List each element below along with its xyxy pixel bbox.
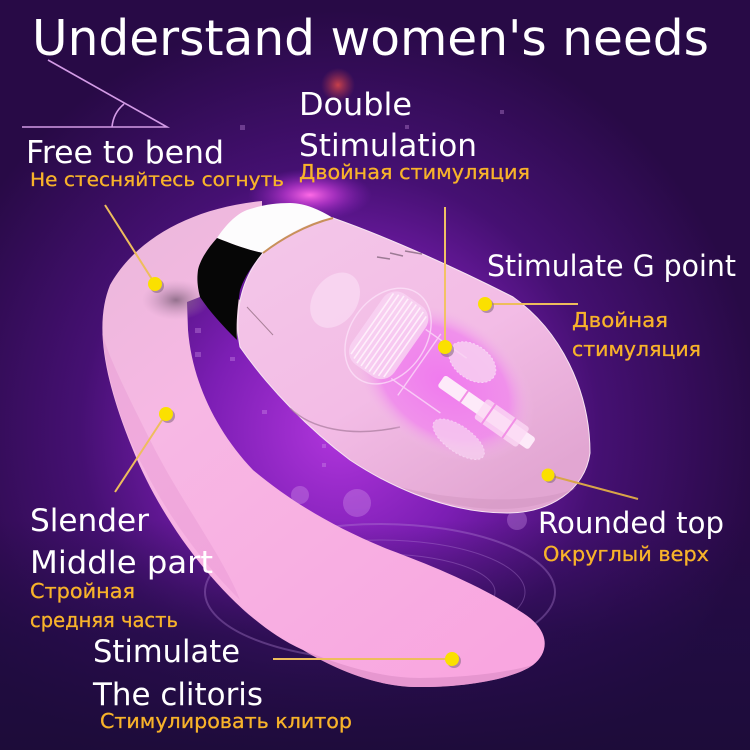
label: stimulate G point: Двойная [572,308,668,332]
callout: double stimulation pointer [438,207,454,357]
label: free to bend: Не стесняйтесь согнуть [30,169,284,191]
title: Understand women's needs [32,10,709,67]
heading: double stimulation: Двойная стимуляция [299,160,530,184]
callout: free to bend pointer [105,205,164,293]
motor illustration [275,236,571,500]
heading: double stimulation: Double [299,87,412,123]
callout: G point pointer [478,297,578,313]
device: pink collar strip [198,280,240,340]
device: curved pink band [102,201,545,687]
heading: double stimulation: Stimulation [299,128,477,164]
label: rounded top: Rounded top [538,506,724,540]
label: stimulate the clitoris: Стимулировать клитор [100,709,352,733]
label: slender middle part [30,503,213,632]
label: rounded top: Округлый верх [543,542,709,566]
label: rounded top [538,506,724,566]
label: stimulate G point: стимуляция [572,337,701,361]
label: free to bend: Free to bend [26,135,224,171]
label: stimulate G point: Stimulate G point [487,249,736,283]
label: stimulate G point [487,249,736,361]
label: slender middle part: Middle part [30,545,213,581]
device: egg-shaped body [238,218,590,513]
label: slender middle part: Стройная [30,579,135,603]
label: stimulate the clitoris: The clitoris [92,677,263,713]
angle diagram icon [22,60,167,127]
label: stimulate the clitoris: Stimulate [93,634,240,670]
callout: slender middle pointer [115,407,175,492]
callout: stimulate clitoris pointer [273,652,461,668]
callout: rounded top pointer [542,468,638,499]
device: chrome band [197,203,333,340]
label: free to bend [26,135,284,191]
label: stimulate the clitoris [92,634,352,733]
label: slender middle part: средняя часть [30,608,178,632]
label: slender middle part: Slender [30,503,149,539]
heading: double stimulation [299,87,530,184]
device: power button marks [377,251,422,259]
